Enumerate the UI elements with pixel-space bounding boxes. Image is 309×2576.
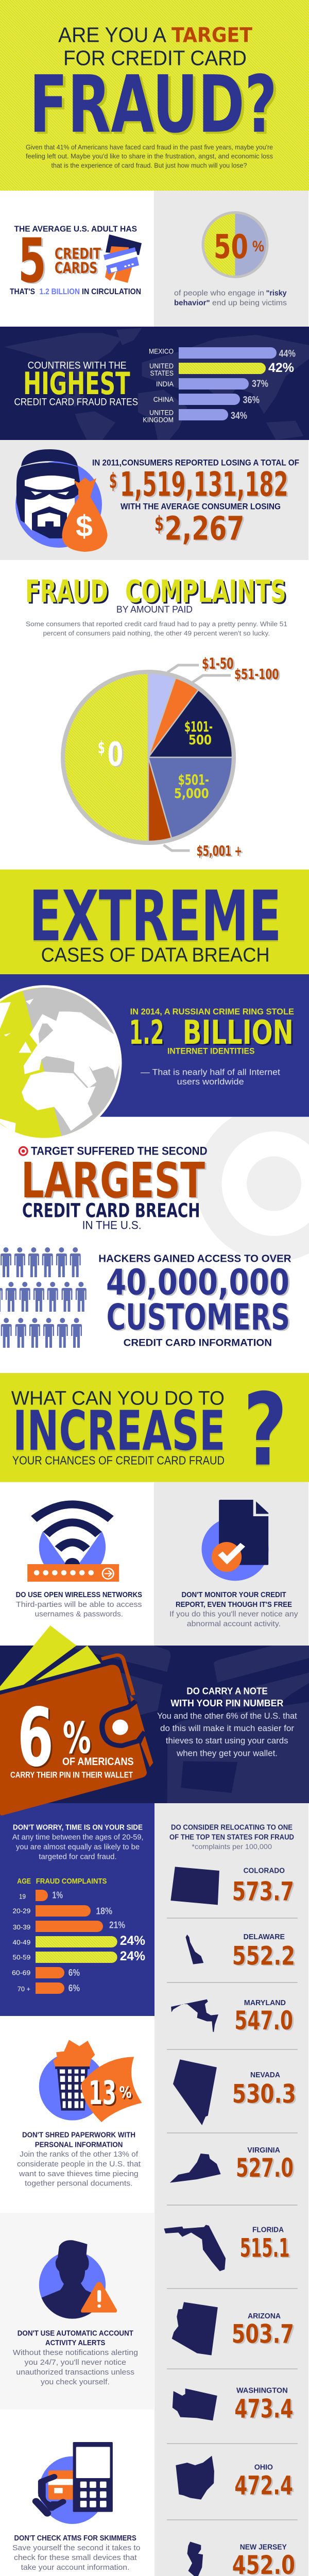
chart: country bars: 42% — [268, 361, 294, 375]
text: time is on your side: you are almost equally as likely to be — [16, 1843, 140, 1852]
world map background — [4, 328, 309, 439]
state: nevada: NEVADA — [250, 2071, 281, 2079]
icon: thief with money bag — [15, 449, 108, 552]
chart: age bars: 21% — [109, 1920, 125, 1930]
text: alerts tip: Without these notifications alerting — [13, 2348, 138, 2357]
text: open wireless tip — [16, 1591, 142, 1619]
text: complaints description: Some consumers that reported credit card fraud had to pay a pretty penny. While 51 — [26, 620, 287, 628]
text: shred tip: considerate people in the U.S. that — [17, 2160, 141, 2168]
text: forty million customers — [98, 1253, 291, 1348]
credit cards label — [55, 245, 101, 277]
text: shred tip: Join the ranks of the other 13% of — [20, 2150, 139, 2159]
big number 5: 5 — [18, 226, 46, 297]
heading: target suffered: IN THE U.S. — [82, 1219, 142, 1232]
stat: six percent: 6 — [18, 1691, 54, 1785]
chart: country bars: 36% — [243, 395, 260, 406]
panel: hero — [0, 0, 309, 191]
background card shapes — [75, 1646, 309, 1803]
title: increase your chances — [11, 1388, 225, 1467]
chart: age bars: 19 — [19, 1893, 26, 1901]
state: maryland — [171, 1999, 293, 2036]
dividers — [167, 1918, 298, 2520]
title: are you a target — [58, 23, 252, 70]
chart: age bars: AGE — [17, 1877, 31, 1886]
text: russian crime ring: users worldwide — [177, 1077, 244, 1087]
text: time is on your side: targeted for card fraud. — [39, 1852, 117, 1861]
stat: six percent — [10, 1691, 134, 1785]
chart: country bars — [143, 347, 296, 424]
chart: age bars: 40-49 — [12, 1938, 30, 1946]
text: risky behavior victims: behavior" — [174, 298, 210, 307]
intro text: feeling left out. Maybe you'd like to share in the frustration, angst, and economic loss — [26, 153, 273, 160]
heading: target suffered: CREDIT CARD BREACH — [22, 1199, 200, 1222]
icon: stack of cards — [104, 234, 142, 283]
text: complaints description — [26, 620, 287, 637]
state: delaware: DELAWARE — [244, 1933, 285, 1941]
title: increase your chances: YOUR CHANCES OF CREDIT CARD FRAUD — [12, 1454, 225, 1467]
text: alerts tip: you 24/7, you'll never notice — [25, 2358, 126, 2367]
credit cards label: CREDIT — [55, 245, 101, 262]
text: shred tip — [17, 2131, 141, 2188]
state: colorado — [170, 1867, 294, 1906]
text: time is on your side: At any time between the ages of 20-59, — [12, 1833, 144, 1842]
text: open wireless tip: Third-parties will be able to access — [16, 1600, 142, 1609]
text: open wireless tip: usernames & passwords. — [35, 1610, 123, 1619]
intro text — [26, 144, 273, 170]
chart: country bars: 34% — [231, 411, 247, 421]
heading: target suffered: LARGEST — [21, 1153, 205, 1209]
chart: age bars: 70 + — [18, 1985, 30, 1993]
text: alerts tip: DON'T USE AUTOMATIC ACCOUNT — [18, 2329, 133, 2337]
text: credit report tip — [169, 1591, 298, 1629]
chart: age bars: 6% — [68, 1983, 80, 1993]
chart: age bars: 24% — [120, 1934, 145, 1948]
heading: average adult: THE AVERAGE U.S. ADULT HAS — [14, 225, 137, 233]
panel: monitor credit report — [154, 1482, 308, 1646]
chart: amount paid pie: $5,001 + — [197, 842, 242, 859]
icon: wifi password — [27, 1487, 119, 1582]
chart: amount paid pie: 500 — [188, 733, 212, 748]
title: increase your chances: WHAT CAN YOU DO TO — [11, 1388, 225, 1410]
icon: wallet with pin cards — [0, 1625, 153, 1816]
chart: country bars: UNITED — [149, 409, 174, 417]
text: risky behavior victims: of people who engage in — [174, 289, 264, 297]
chart: fifty percent pie: % — [252, 238, 264, 255]
state: arizona: ARIZONA — [248, 2312, 281, 2320]
title: are you a target: ARE YOU A — [58, 23, 167, 47]
panel: age and fraud — [0, 1803, 154, 2016]
text: skimmers tip: take your account information. — [21, 2563, 129, 2572]
chart: age bars: 30-39 — [13, 1923, 30, 1931]
chart: age bars: FRAUD COMPLAINTS — [36, 1877, 107, 1886]
text: carry a note — [157, 1686, 297, 1758]
text: carry a note: when they get your wallet. — [176, 1748, 278, 1758]
state: ohio: OHIO — [254, 2463, 273, 2471]
state: new jersey — [187, 2541, 295, 2576]
state: virginia — [170, 2146, 294, 2183]
text: alerts tip: ACTIVITY ALERTS — [45, 2339, 106, 2347]
chart: amount paid pie: $501- — [178, 771, 209, 788]
text: total in circulation: 1.2 BILLION — [39, 287, 80, 296]
text: shred tip: DON'T SHRED PAPERWORK WITH — [22, 2131, 135, 2139]
chart: country bars: 37% — [252, 379, 268, 389]
text: russian crime ring: IN 2014, A RUSSIAN CRIME RING STOLE — [130, 1007, 294, 1016]
text: russian crime ring: INTERNET IDENTITIES — [167, 1046, 254, 1056]
text: alerts tip — [13, 2329, 138, 2386]
chart: amount paid pie — [63, 655, 279, 859]
text: complaints description: percent of consumers paid nothing, the other 49 percent weren't so lucky. — [43, 629, 270, 637]
text: total reported losses: IN 2011,CONSUMERS REPORTED LOSING A TOTAL OF — [92, 458, 299, 467]
heading: fraud complaints: FRAUD — [25, 574, 108, 609]
text: shred tip: want to save thieves time piecing — [19, 2170, 139, 2178]
state: washington — [173, 2387, 294, 2424]
text: total in circulation: THAT'S — [10, 287, 35, 296]
state: arizona — [172, 2302, 294, 2355]
text: russian crime ring: — That is nearly half of all Internet — [141, 1067, 280, 1077]
panel: open wireless networks — [16, 1487, 142, 1619]
text: forty million customers: HACKERS GAINED ACCESS TO OVER — [98, 1253, 291, 1264]
panel: countries with highest rates — [0, 327, 309, 440]
stat: thirteen percent: 13 — [89, 2074, 116, 2112]
stat: six percent: % — [63, 1713, 91, 1764]
text: open wireless tip: DO USE OPEN WIRELESS NETWORKS — [16, 1591, 142, 1599]
text: skimmers tip: Save yourself the second it takes to — [12, 2544, 140, 2552]
chart: age bars: 50-59 — [12, 1953, 30, 1961]
heading: relocating — [169, 1824, 294, 1851]
text: alerts tip: unauthorized transactions unless — [16, 2368, 134, 2377]
text: skimmers tip — [12, 2534, 140, 2572]
text: credit report tip: REPORT, EVEN THOUGH IT'S FREE — [176, 1601, 292, 1609]
stat: six percent: CARRY THEIR PIN IN THEIR WALLET — [10, 1771, 133, 1780]
chart: country bars: KINGDOM — [143, 416, 174, 424]
chart: fifty percent pie: 50 — [214, 228, 248, 266]
state: virginia: VIRGINIA — [247, 2146, 281, 2155]
text: skimmers tip: DON'T CHECK ATMS FOR SKIMMERS — [14, 2534, 136, 2543]
chart: amount paid pie: 5,000 — [174, 786, 209, 802]
text: average consumer loss — [121, 502, 281, 547]
text: time is on your side — [12, 1824, 144, 1861]
state: ohio — [176, 2456, 293, 2501]
text: risky behavior victims — [174, 289, 287, 307]
icon: globe — [0, 985, 122, 1138]
panel: top ten states — [154, 1803, 308, 2576]
text: total reported losses: $ — [109, 468, 117, 493]
title: are you a target: FOR CREDIT CARD — [63, 46, 247, 70]
chart: country bars: UNITED — [149, 362, 174, 370]
state: colorado: COLORADO — [244, 1867, 285, 1875]
text: total in circulation: IN CIRCULATION — [82, 287, 141, 296]
chart: country bars: INDIA — [156, 380, 174, 388]
state: washington: WASHINGTON — [236, 2387, 288, 2395]
chart: age bars: 20-29 — [12, 1907, 30, 1914]
heading: target suffered — [21, 1145, 208, 1232]
panel: atm skimmers — [12, 2442, 140, 2572]
icon: shredder bin — [39, 2040, 142, 2122]
icon: person with warning — [38, 2240, 117, 2322]
text: average consumer loss: $ — [154, 512, 164, 536]
text: average consumer loss: WITH THE AVERAGE CONSUMER LOSING — [121, 502, 281, 511]
icon: credit report document — [201, 1499, 269, 1581]
panel: account alerts — [0, 2213, 154, 2410]
chart: country bars: 44% — [279, 349, 296, 360]
stat: six percent: OF AMERICANS — [62, 1756, 134, 1768]
text: russian crime ring: 1.2 — [129, 1013, 164, 1052]
icon: thief with money bag: $ — [76, 510, 93, 543]
credit cards label: CARDS — [55, 259, 97, 277]
intro text: that is the experience of card fraud. But just how much will you lose? — [52, 162, 247, 170]
state: delaware — [185, 1933, 295, 1971]
icon: rows of people — [0, 1247, 87, 1348]
title: are you a target: TARGET — [171, 24, 252, 47]
text: forty million customers: CREDIT CARD INFORMATION — [124, 1337, 272, 1348]
heading: relocating: *complaints per 100,000 — [192, 1842, 272, 1851]
chart: age bars: 18% — [96, 1906, 112, 1917]
heading: fraud complaints: BY AMOUNT PAID — [116, 604, 193, 615]
text: alerts tip: you check yourself. — [41, 2378, 110, 2386]
panel: consumer losses — [0, 440, 308, 560]
icon: atm with card — [36, 2442, 113, 2524]
text: risky behavior victims: end up being victims — [212, 298, 287, 307]
chart: country bars: STATES — [150, 369, 174, 377]
panel: five credit cards — [10, 225, 142, 297]
subtitle: cases of data breach: CASES OF DATA BREACH — [41, 944, 270, 967]
chart: age bars: 6% — [68, 1968, 80, 1978]
heading: highest fraud rates: HIGHEST — [23, 366, 130, 402]
icon: target logo — [19, 1146, 28, 1156]
text: carry a note: WITH YOUR PIN NUMBER — [170, 1698, 283, 1708]
icon: big question mark: ? — [243, 1372, 287, 1488]
heading: highest fraud rates — [14, 360, 138, 408]
title: increase your chances: INCREASE — [13, 1399, 225, 1463]
text: total in circulation — [10, 287, 141, 296]
text: carry a note: DO CARRY A NOTE — [186, 1686, 268, 1696]
panel: target breach — [0, 1145, 291, 1348]
panel: what can you do heading — [0, 1372, 309, 1488]
text: credit report tip: DON'T MONITOR YOUR CREDIT — [181, 1591, 286, 1599]
chart: age bars — [12, 1877, 145, 1994]
heading: highest fraud rates: COUNTRIES WITH THE — [28, 360, 127, 371]
panel: russian crime ring — [0, 974, 309, 1117]
icon: giant target logo background — [196, 1113, 309, 1262]
state: nevada — [173, 2059, 296, 2125]
chart: fifty percent pie — [202, 211, 269, 278]
panel: fraud complaints — [25, 574, 287, 859]
text: carry a note: thieves to start using your cards — [166, 1736, 288, 1745]
stat: thirteen percent: % — [119, 2084, 132, 2102]
state: new jersey: NEW JERSEY — [240, 2544, 287, 2552]
text: risky behavior victims: "risky — [266, 289, 287, 297]
heading: highest fraud rates: CREDIT CARD FRAUD RATES — [14, 397, 138, 408]
panel: pin number in wallet — [0, 1625, 309, 1816]
chart: amount paid pie: $101- — [184, 718, 213, 735]
heading: relocating: OF THE TOP TEN STATES FOR FRAUD — [169, 1834, 294, 1842]
chart: age bars: 60-69 — [12, 1969, 30, 1976]
chart: amount paid pie: $1-50 — [202, 655, 234, 672]
panel: risky behavior — [154, 191, 308, 327]
chart: amount paid pie: $ — [98, 737, 105, 757]
state: florida — [164, 2225, 290, 2271]
text: credit report tip: If you do this you'll never notice any — [169, 1610, 298, 1619]
text: time is on your side: DON'T WORRY, TIME IS ON YOUR SIDE — [13, 1824, 143, 1832]
chart: country bars: CHINA — [153, 396, 174, 403]
chart: country bars: MEXICO — [149, 348, 174, 355]
panel: extreme cases heading — [0, 870, 309, 974]
text: credit report tip: abnormal account activity. — [187, 1620, 281, 1629]
text: shred tip: together personal documents. — [25, 2179, 133, 2188]
text: russian crime ring — [129, 1007, 294, 1087]
chart: amount paid pie: $51-100 — [234, 666, 279, 683]
heading: target suffered: TARGET SUFFERED THE SECOND — [31, 1145, 208, 1158]
chart: age bars: 1% — [52, 1890, 63, 1900]
state: florida: FLORIDA — [252, 2226, 284, 2234]
text: carry a note: You and the other 6% of the U.S. that — [157, 1711, 297, 1721]
heading: relocating: DO CONSIDER RELOCATING TO ONE — [171, 1824, 293, 1832]
text: carry a note: do this will make it much easier for — [160, 1723, 294, 1733]
chart: amount paid pie: 0 — [108, 736, 123, 774]
intro text: Given that 41% of Americans have faced card fraud in the past five years, maybe you're — [26, 144, 273, 151]
panel: shred paperwork — [17, 2040, 142, 2188]
state: maryland: MARYLAND — [244, 1999, 286, 2007]
text: shred tip: PERSONAL INFORMATION — [35, 2141, 123, 2149]
text: average consumer loss: 2,267 — [165, 509, 244, 547]
heading: fraud complaints — [25, 574, 286, 615]
chart: age bars: 24% — [120, 1949, 145, 1963]
text: skimmers tip: check for these small devices that — [14, 2553, 137, 2562]
